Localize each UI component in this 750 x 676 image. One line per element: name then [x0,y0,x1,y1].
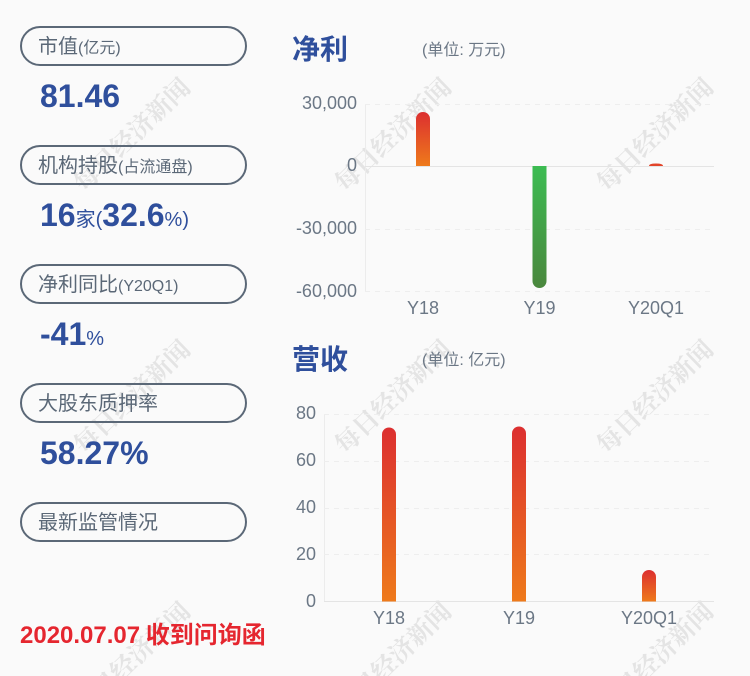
bar: Y19 [532,166,547,288]
watermarks: 每日经济新闻 [69,335,196,459]
pill: institutions [20,145,247,185]
label: institutions: 机构持股(占流通盘) [38,155,193,177]
label: net profit yoy: 净利同比(Y20Q1) [38,274,178,296]
chart: revenue: Y20Q1 [621,608,677,628]
pill: regulation [20,502,247,542]
pill: pledge [20,383,247,423]
chart: net profit: Y19 [523,298,556,318]
watermarks: 每日经济新闻 [592,73,719,197]
watermarks: 每日经济新闻 [330,73,457,197]
bar: Y20Q1 [649,164,663,166]
value: net profit yoy: -41% [40,316,104,352]
axis labels: 30,000 [302,93,357,113]
regulatory note: 2020.07.07 收到问询函 [20,622,266,649]
value: institutions: 16家(32.6%) [40,197,189,233]
axis labels: 60 [296,450,316,470]
label: regulation: 最新监管情况 [38,512,158,534]
bar: Y19 [512,426,526,602]
chart: net profit [296,93,714,318]
axis labels [296,93,357,301]
axis labels: -30,000 [296,218,357,238]
axis labels: 20 [296,544,316,564]
chart: net profit: Y18 [407,298,439,318]
label: market cap: 市值(亿元) [38,36,121,58]
unit: net profit: (单位: 万元) [422,42,506,59]
value: market cap: 81.46 [40,78,120,114]
axis labels: 40 [296,497,316,517]
chart: revenue: Y18 [373,608,405,628]
axis labels: -60,000 [296,281,357,301]
axis labels [296,403,316,611]
axis labels: 80 [296,403,316,423]
chart: revenue: Y19 [503,608,535,628]
value: pledge: 58.27% [40,435,149,471]
watermarks: 每日经济新闻 [592,335,719,459]
pill: net profit yoy [20,264,247,304]
bar: Y18 [382,428,396,602]
pill: market cap [20,26,247,66]
watermarks: 每日经济新闻 [330,335,457,459]
label: pledge: 大股东质押率 [38,393,158,415]
heading: revenue: 营收 [292,344,348,375]
bar: Y18 [416,112,430,166]
axis labels: 0 [306,591,316,611]
bar: Y20Q1 [642,570,656,602]
unit: revenue: (单位: 亿元) [422,352,506,369]
chart: revenue [296,403,714,628]
watermarks: 每日经济新闻 [69,73,196,197]
heading: net profit: 净利 [292,34,348,65]
axis labels: 0 [347,155,357,175]
chart: net profit: Y20Q1 [628,298,684,318]
